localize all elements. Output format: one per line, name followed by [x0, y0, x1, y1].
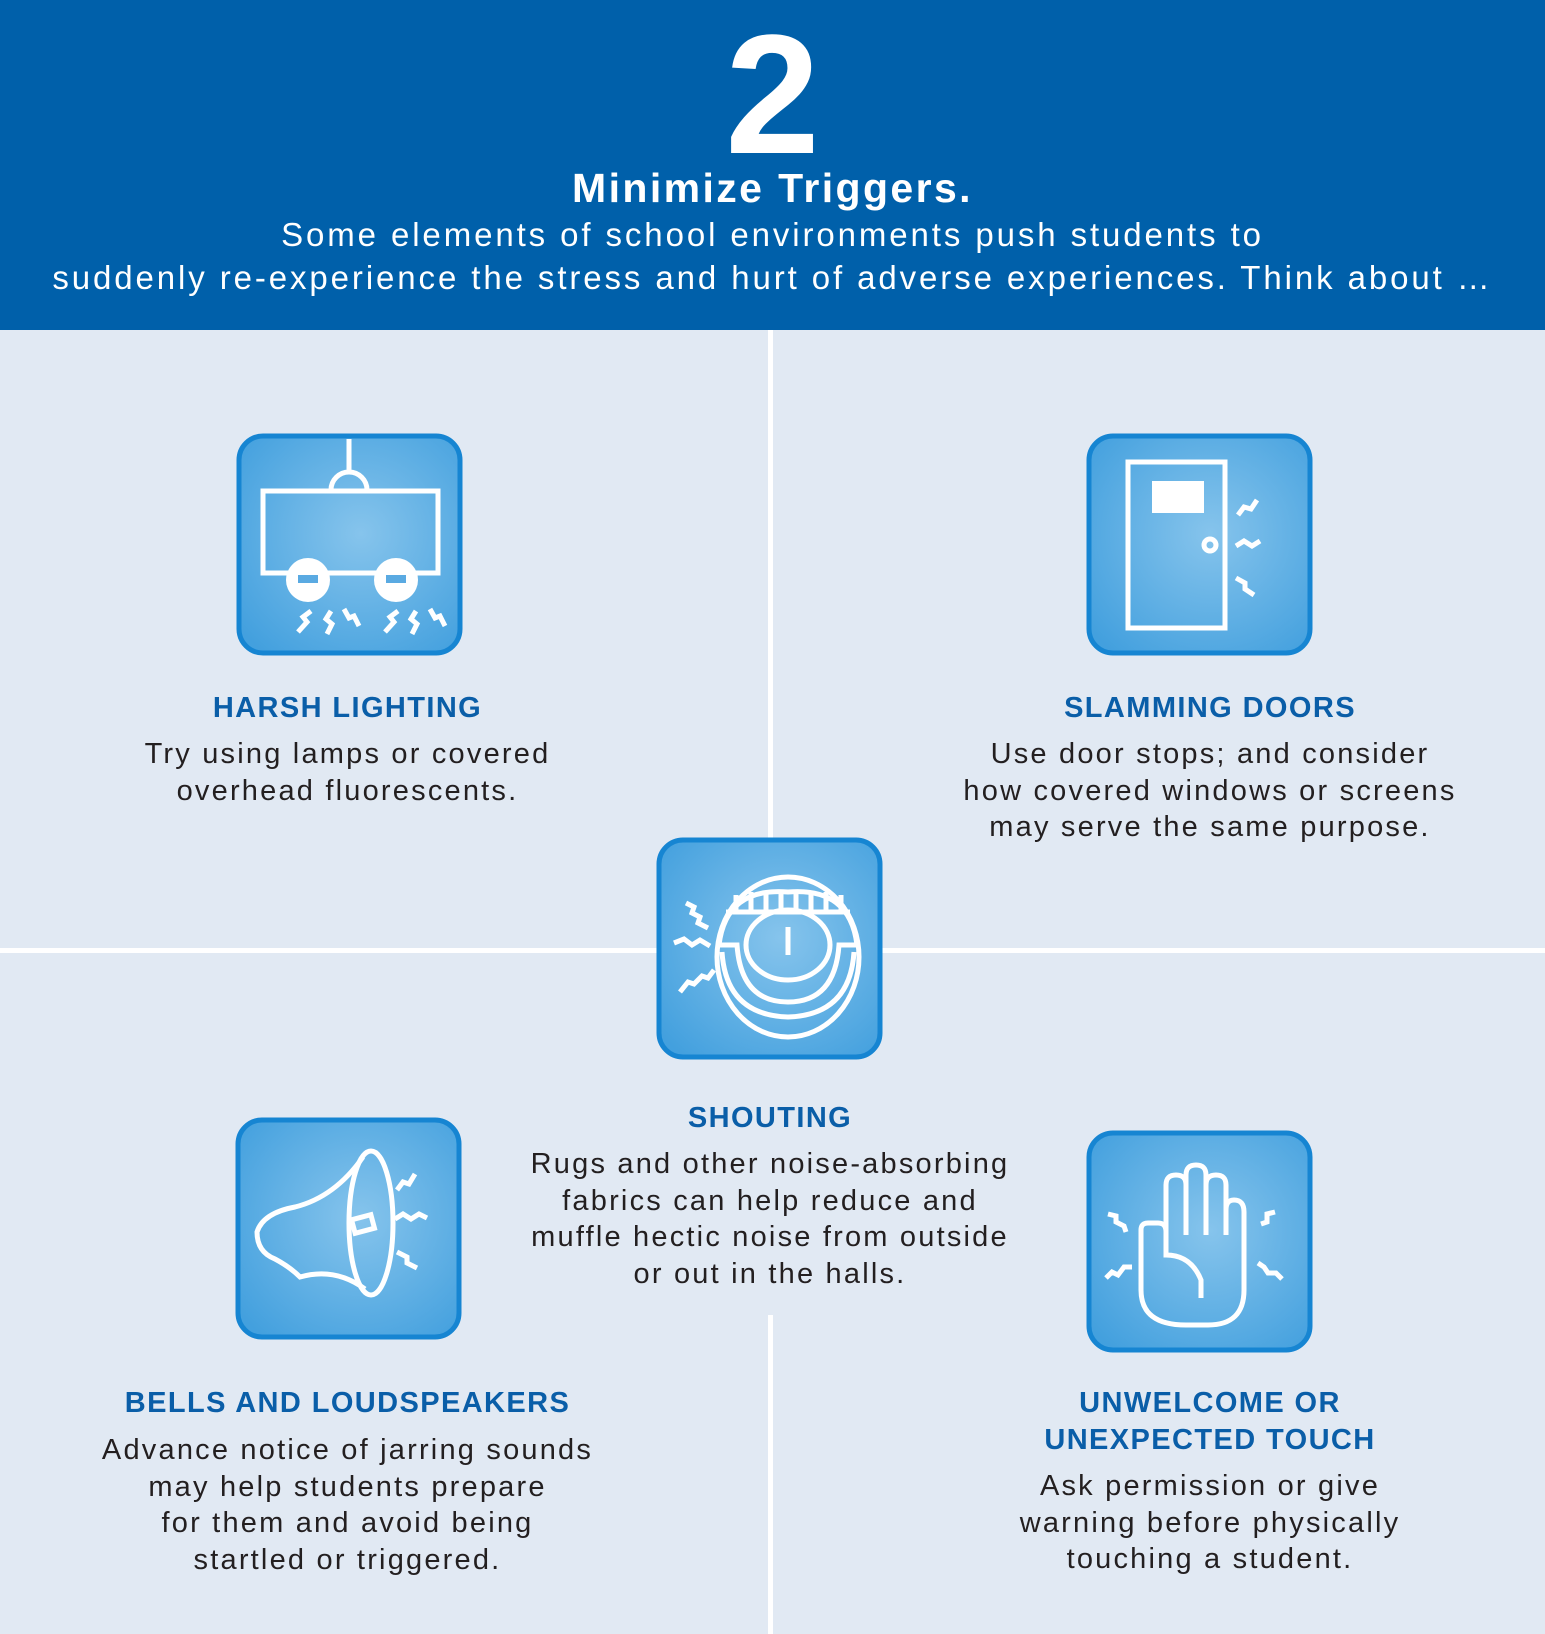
- text: bells and loudspeakers: Advance notice of jarring sounds: [102, 1434, 593, 1466]
- text: slamming doors: how covered windows or screens: [963, 774, 1457, 806]
- text: slamming doors: may serve the same purpose.: [989, 811, 1431, 843]
- heading: unwelcome touch: UNEXPECTED TOUCH: [1044, 1424, 1376, 1456]
- text: shouting: or out in the halls.: [634, 1258, 906, 1290]
- heading: unwelcome touch: UNWELCOME OR: [1079, 1387, 1341, 1419]
- heading: harsh lighting: HARSH LIGHTING: [213, 692, 482, 724]
- text: harsh lighting: Try using lamps or covered: [145, 738, 550, 770]
- header: [0, 0, 1545, 330]
- text: unwelcome touch: Ask permission or give: [1040, 1470, 1380, 1502]
- text: shouting: fabrics can help reduce and: [562, 1184, 978, 1216]
- heading: bells and loudspeakers: BELLS AND LOUDSPEAKERS: [125, 1387, 570, 1419]
- number 2: 2: [725, 0, 820, 190]
- text: harsh lighting: [145, 738, 550, 806]
- subtitle: Some elements of school environments push students to: [281, 216, 1264, 253]
- icon: harsh lighting: [236, 434, 462, 656]
- icon: shouting: [656, 838, 882, 1060]
- text: slamming doors: Use door stops; and consider: [991, 738, 1429, 770]
- title: Minimize Triggers.: [572, 165, 973, 211]
- text: unwelcome touch: touching a student.: [1067, 1543, 1353, 1575]
- text: bells and loudspeakers: for them and avoid being: [161, 1507, 534, 1539]
- text: bells and loudspeakers: [102, 1434, 593, 1576]
- text: shouting: [531, 1148, 1009, 1290]
- heading: slamming doors: SLAMMING DOORS: [1064, 692, 1356, 724]
- subtitle: suddenly re-experience the stress and hurt of adverse experiences. Think about …: [52, 259, 1493, 296]
- text: unwelcome touch: warning before physically: [1020, 1506, 1400, 1538]
- icon: unwelcome touch: [1086, 1130, 1312, 1352]
- text: bells and loudspeakers: startled or triggered.: [194, 1544, 501, 1576]
- text: bells and loudspeakers: may help students prepare: [148, 1470, 547, 1502]
- icon: bells and loudspeakers: [236, 1118, 462, 1340]
- heading: unwelcome touch: [1044, 1387, 1376, 1456]
- text: slamming doors: [963, 738, 1457, 843]
- text: shouting: muffle hectic noise from outside: [531, 1221, 1009, 1253]
- text: unwelcome touch: [1020, 1470, 1400, 1575]
- text: harsh lighting: overhead fluorescents.: [177, 774, 518, 806]
- heading: shouting: SHOUTING: [688, 1102, 852, 1134]
- icon: slamming doors: [1086, 434, 1312, 656]
- subtitle: [52, 216, 1493, 296]
- text: shouting: Rugs and other noise-absorbing: [531, 1148, 1009, 1180]
